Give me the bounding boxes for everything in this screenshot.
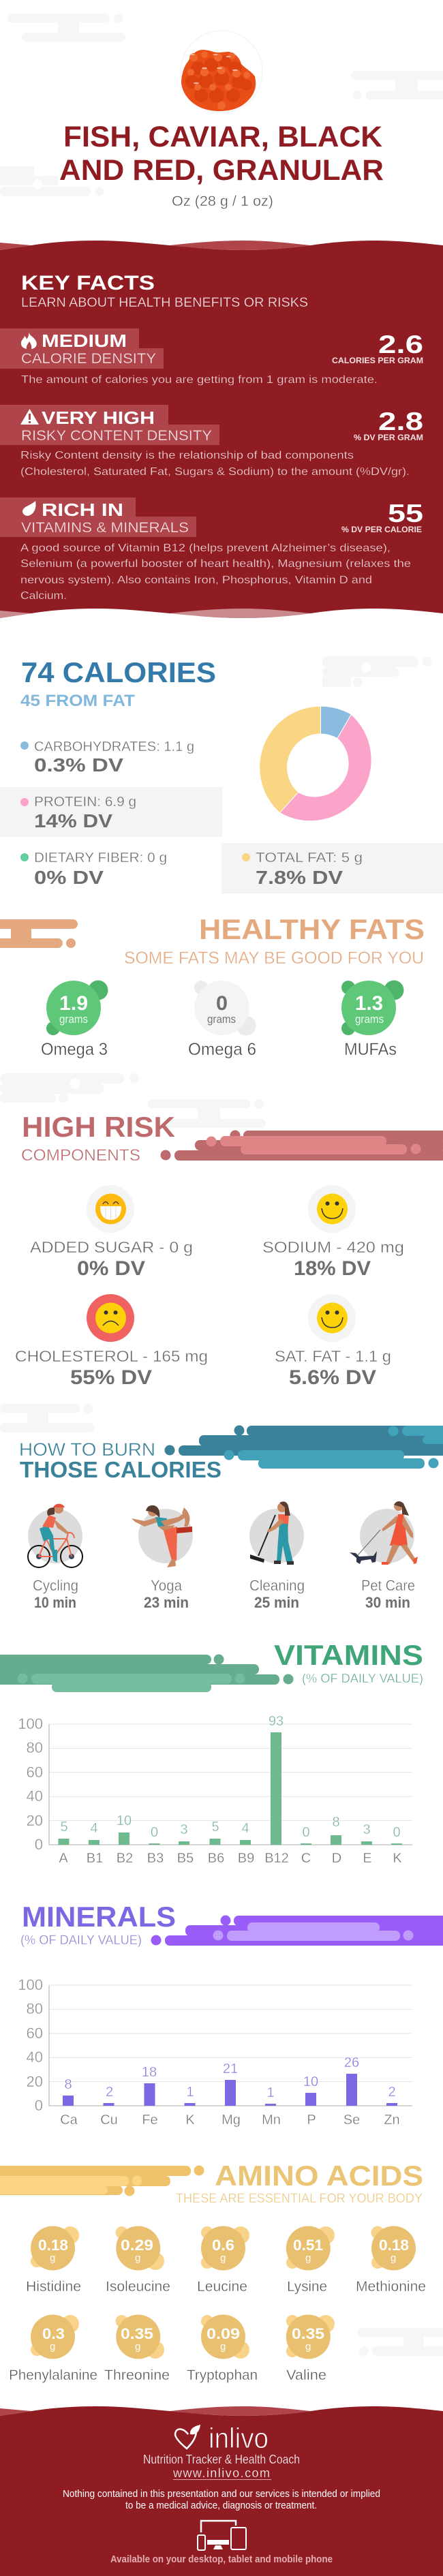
fact: vitamins and minerals: RICH IN [42, 500, 123, 520]
activity labels: Yoga [151, 1577, 183, 1594]
footer tagline [143, 2453, 300, 2480]
blob: tryptophan: Tryptophan [187, 2367, 258, 2383]
bar chart: vitamins: C [301, 1851, 311, 1866]
blob: tryptophan [187, 2314, 258, 2383]
bar chart: vitamins: 0 [393, 1825, 401, 1840]
bar chart: minerals: 0 [35, 2097, 43, 2114]
legend: protein: PROTEIN: 6.9 g [34, 795, 136, 810]
footer tagline: Nutrition Tracker & Health Coach [143, 2453, 300, 2466]
activity: yoga [132, 1505, 193, 1567]
bar chart: minerals: Se [343, 2113, 360, 2128]
disclaimer [63, 2488, 380, 2511]
legend: dietary fiber [20, 850, 167, 888]
item: saturated fat [275, 1294, 391, 1389]
bar chart: vitamins: 0 [151, 1825, 158, 1840]
blob: histidine: g [50, 2252, 55, 2264]
blob: tryptophan: g [220, 2341, 226, 2352]
bar chart: minerals: Ca [60, 2113, 78, 2128]
panel: burn calories [19, 1426, 443, 1611]
blob: lysine: g [305, 2252, 311, 2264]
title: FISH, CAVIAR, BLACK [63, 121, 382, 153]
legend: dietary fiber: 0% DV [34, 867, 104, 888]
heading: amino acids: AMINO ACIDS [215, 2160, 423, 2192]
bar chart: vitamins: 5 [60, 1820, 68, 1835]
fact: risky content density: RISKY CONTENT DENSITY [21, 428, 212, 444]
heading: healthy fats: HEALTHY FATS [199, 913, 425, 945]
heading: healthy fats [124, 913, 425, 968]
activity labels: 10 min [34, 1594, 76, 1611]
logo wordmark: inlivo [209, 2422, 269, 2454]
fact: risky content density: VERY HIGH [42, 408, 155, 428]
blob: mufas: grams [355, 1013, 384, 1026]
blob: lysine [286, 2226, 335, 2295]
fact: calorie density: 2.6 [378, 331, 423, 358]
blob: omega 3: Omega 3 [41, 1040, 108, 1059]
blob: valine: Valine [286, 2367, 326, 2383]
donut chart [260, 706, 371, 821]
fact: risky content density: % DV PER GRAM [354, 433, 423, 442]
bar chart: minerals: Zn [384, 2113, 400, 2128]
activity: cycling [28, 1504, 82, 1567]
icon: leaf [22, 501, 36, 516]
heading: amino acids: THESE ARE ESSENTIAL FOR YOUR BODY [176, 2192, 423, 2206]
blob: omega 6: 0 [216, 992, 228, 1015]
fact: calorie density: The amount of calories you are getting from 1 gram is moderate. [21, 374, 378, 386]
bar chart: vitamins: 3 [180, 1822, 188, 1837]
bar chart: vitamins [18, 1714, 412, 1866]
bar chart: vitamins: B2 [117, 1851, 133, 1866]
bar chart: vitamins: 4 [90, 1821, 98, 1836]
activity labels: Cleaning [249, 1577, 305, 1594]
bar chart: vitamins: 3 [363, 1822, 371, 1837]
bar chart: vitamins: 0 [35, 1836, 43, 1853]
bar chart: vitamins: E [363, 1851, 372, 1866]
item: added sugar [30, 1185, 193, 1280]
fact: calorie density: CALORIES PER GRAM [332, 356, 423, 365]
blob: omega 3 [41, 980, 108, 1059]
bar chart: minerals: Mn [262, 2113, 281, 2128]
bar chart: minerals: 21 [223, 2061, 238, 2076]
blob: histidine [26, 2226, 81, 2295]
item: added sugar: 0% DV [77, 1257, 145, 1280]
decoration: green bars [0, 1655, 293, 1692]
item: saturated fat: 5.6% DV [289, 1366, 376, 1389]
blob: leucine: Leucine [197, 2279, 247, 2295]
heading: vitamins: VITAMINS [274, 1639, 423, 1671]
bar chart: minerals: 2 [106, 2085, 113, 2100]
blob: methionine: g [391, 2252, 396, 2264]
heading: how to burn [19, 1439, 222, 1482]
legend: protein: 14% DV [34, 810, 112, 831]
legend: dietary fiber: DIETARY FIBER: 0 g [34, 850, 167, 865]
fact: calorie density: CALORIE DENSITY [21, 351, 156, 367]
blob: isoleucine [106, 2226, 170, 2295]
blob: phenylalanine: Phenylalanine [9, 2367, 97, 2383]
heading: high risk [21, 1111, 175, 1165]
blob: mufas: 1.3 [355, 992, 383, 1015]
blob: leucine [197, 2226, 249, 2295]
blob: isoleucine: g [135, 2252, 140, 2264]
item: sodium [262, 1185, 404, 1280]
bar chart: minerals: 80 [27, 2000, 43, 2017]
blob: valine [286, 2314, 335, 2383]
fact: vitamins and minerals: Selenium (a powerful booster of heart health), Magnesium (relaxes the [20, 558, 411, 570]
panel: healthy fats [0, 913, 425, 1059]
heading: 74 calories [20, 656, 216, 710]
bar chart: vitamins: B3 [147, 1851, 164, 1866]
bar chart: vitamins: 8 [332, 1815, 340, 1830]
bar chart: minerals: 20 [27, 2073, 43, 2090]
panel: key facts [0, 241, 443, 624]
heading: minerals: MINERALS [22, 1901, 176, 1933]
title [59, 121, 384, 187]
bar chart: vitamins: 10 [117, 1813, 132, 1828]
fact: risky content density [0, 405, 423, 478]
heading: vitamins [274, 1639, 423, 1685]
bar chart: vitamins: A [59, 1851, 68, 1866]
blob: omega 3: grams [59, 1013, 88, 1026]
heading: key facts [21, 272, 308, 310]
item: saturated fat: SAT. FAT - 1.1 g [275, 1347, 391, 1365]
bar chart: vitamins: 60 [27, 1764, 43, 1781]
bar chart: minerals: 60 [27, 2025, 43, 2042]
activity: cleaning [249, 1501, 304, 1565]
heading: how to burn: HOW TO BURN [19, 1439, 155, 1460]
fact: vitamins and minerals: % DV PER CALORIE [341, 525, 422, 534]
blob: phenylalanine: 0.3 [42, 2325, 65, 2342]
activity labels: 25 min [254, 1594, 299, 1611]
bar chart: minerals: 10 [303, 2074, 318, 2089]
activity labels: Cycling [33, 1577, 78, 1594]
heading: high risk: HIGH RISK [22, 1111, 175, 1143]
activity labels: 23 min [144, 1594, 189, 1611]
panel: calories [0, 656, 443, 893]
item: sodium: 18% DV [294, 1257, 371, 1280]
bar chart: vitamins: B9 [238, 1851, 254, 1866]
blob: isoleucine: Isoleucine [106, 2279, 170, 2295]
heading: 74 calories: 74 CALORIES [21, 656, 216, 688]
blob: histidine: 0.18 [38, 2237, 68, 2254]
blob: threonine: g [135, 2341, 140, 2352]
heading: minerals [20, 1901, 176, 1948]
fact: vitamins and minerals [0, 497, 423, 602]
bar chart: vitamins: 0 [302, 1825, 310, 1840]
legend: carbohydrates: 0.3% DV [34, 754, 123, 776]
bar chart: vitamins: 20 [27, 1812, 43, 1829]
panel: high risk [15, 1111, 443, 1389]
activity labels: 30 min [365, 1594, 410, 1611]
icon: inlivo heart logo [175, 2425, 200, 2449]
blob: omega 6 [188, 981, 256, 1059]
decoration: orange bars [0, 919, 78, 948]
item: cholesterol [15, 1294, 208, 1389]
availability note: Available on your desktop, tablet and mobile phone [110, 2554, 333, 2565]
bar chart: vitamins: 4 [241, 1821, 249, 1836]
fact: vitamins and minerals: 55 [388, 500, 423, 527]
bar chart: vitamins: K [393, 1851, 402, 1866]
legend: total fat: TOTAL FAT: 5 g [256, 850, 363, 865]
decoration: purple bars [151, 1915, 443, 1946]
fact: calorie density: MEDIUM [42, 331, 127, 351]
icon: flame [21, 332, 37, 349]
bar chart: minerals: 1 [266, 2085, 275, 2100]
blob: isoleucine: 0.29 [121, 2237, 153, 2254]
blob: histidine: Histidine [26, 2279, 81, 2295]
bar chart: vitamins: B12 [264, 1851, 289, 1866]
bar chart: minerals: Cu [100, 2113, 118, 2128]
blob: methionine [356, 2226, 426, 2295]
blob: methionine: Methionine [356, 2279, 426, 2295]
heading: minerals: (% OF DAILY VALUE) [20, 1933, 142, 1948]
blob: leucine: g [220, 2252, 226, 2264]
fact: risky content density: 2.8 [378, 408, 423, 435]
heading: vitamins: (% OF DAILY VALUE) [302, 1672, 423, 1685]
activity labels: Pet Care [361, 1577, 415, 1594]
serving size: Oz (28 g / 1 oz) [172, 194, 273, 209]
blob: tryptophan: 0.09 [207, 2325, 240, 2342]
bar chart: minerals: 26 [344, 2055, 359, 2070]
fact: vitamins and minerals: VITAMINS & MINERALS [21, 520, 189, 536]
heading: key facts: LEARN ABOUT HEALTH BENEFITS OR RISKS [21, 296, 308, 310]
legend: total fat [242, 850, 363, 888]
bar chart: vitamins: 80 [27, 1739, 43, 1756]
legend: total fat: 7.8% DV [256, 867, 343, 888]
bar chart: vitamins: D [332, 1851, 341, 1866]
fact: risky content density: (Cholesterol, Saturated Fat, Sugars & Sodium) to the amount (%DV/gr). [20, 466, 410, 478]
blob: omega 6: grams [207, 1013, 236, 1026]
bar chart: minerals: 8 [64, 2077, 72, 2092]
title: AND RED, GRANULAR [59, 154, 384, 187]
heading: high risk: COMPONENTS [21, 1146, 140, 1165]
activity: pet care [350, 1501, 418, 1565]
heading: 74 calories: 45 FROM FAT [20, 692, 135, 710]
blob: threonine: Threonine [104, 2367, 170, 2383]
bar chart: vitamins: 93 [269, 1714, 284, 1729]
blob: omega 6: Omega 6 [188, 1040, 256, 1059]
fact: vitamins and minerals: nervous system). Also contains Iron, Phosphorus, Vitamin D and [20, 574, 372, 586]
bar chart: minerals: P [307, 2113, 316, 2128]
decoration: red bars [161, 1130, 443, 1161]
bar chart: minerals: Mg [222, 2113, 241, 2128]
disclaimer: Nothing contained in this presentation and our services is intended or implied [63, 2488, 380, 2500]
item: added sugar: ADDED SUGAR - 0 g [30, 1238, 193, 1256]
blob: methionine: 0.18 [379, 2237, 409, 2254]
bar chart: minerals [18, 1976, 412, 2128]
panel: minerals [18, 1901, 443, 2128]
bar chart: minerals: Fe [142, 2113, 158, 2128]
legend: protein [20, 795, 136, 831]
blob: threonine: 0.35 [121, 2325, 153, 2342]
item: cholesterol: CHOLESTEROL - 165 mg [15, 1347, 208, 1365]
blob: valine: 0.35 [292, 2325, 324, 2342]
blob: mufas: MUFAs [344, 1040, 397, 1059]
icon: warning triangle [20, 409, 39, 425]
legend: carbohydrates [20, 739, 194, 776]
bar chart: vitamins: B1 [87, 1851, 103, 1866]
legend: carbohydrates: CARBOHYDRATES: 1.1 g [34, 739, 194, 754]
heading: amino acids [176, 2160, 423, 2206]
disclaimer: to be a medical advice, diagnosis or treatment. [125, 2500, 317, 2511]
bar chart: vitamins: 40 [27, 1788, 43, 1805]
heading: key facts: KEY FACTS [21, 272, 155, 294]
item: cholesterol: 55% DV [70, 1366, 152, 1389]
fact: vitamins and minerals: Calcium. [20, 590, 67, 602]
fact: risky content density: Risky Content density is the relationship of bad components [20, 450, 354, 461]
bar chart: vitamins: B5 [177, 1851, 194, 1866]
blob: valine: g [305, 2341, 311, 2352]
panel: footer [0, 2406, 443, 2576]
item: sodium: SODIUM - 420 mg [262, 1238, 404, 1256]
bar chart: minerals: 2 [388, 2085, 396, 2100]
decoration: teal bars [165, 1426, 443, 1469]
activity labels [33, 1577, 415, 1611]
panel: vitamins [0, 1639, 423, 1866]
footer tagline: www.inlivo.com [172, 2466, 270, 2480]
bar chart: minerals: 1 [186, 2085, 194, 2100]
fact: calorie density [0, 328, 423, 386]
bar chart: minerals: 18 [142, 2065, 157, 2080]
fact: vitamins and minerals: A good source of Vitamin B12 (helps prevent Alzheimer’s disease), [20, 542, 391, 554]
heading: healthy fats: SOME FATS MAY BE GOOD FOR YOU [124, 949, 424, 968]
bar chart: minerals: 40 [27, 2049, 43, 2066]
blob: phenylalanine [9, 2314, 97, 2383]
icon: caviar photo [181, 31, 262, 112]
blob: omega 3: 1.9 [59, 992, 88, 1015]
blob: lysine: 0.51 [293, 2237, 323, 2254]
bar chart: minerals: 100 [18, 1976, 43, 1993]
decoration: yellow bars [0, 2166, 204, 2196]
blob: phenylalanine: g [50, 2341, 55, 2352]
blob: lysine: Lysine [287, 2279, 327, 2295]
panel: amino acids [0, 2160, 426, 2383]
bar chart: vitamins: 100 [18, 1715, 43, 1732]
blob: leucine: 0.6 [212, 2237, 234, 2254]
blob: mufas [341, 980, 403, 1059]
bar chart: minerals: K [185, 2113, 195, 2128]
bar chart: vitamins: B6 [208, 1851, 224, 1866]
blob: threonine [104, 2314, 170, 2383]
icon: devices [198, 2521, 246, 2550]
bar chart: vitamins: 5 [211, 1820, 219, 1835]
heading: how to burn: THOSE CALORIES [20, 1457, 222, 1482]
